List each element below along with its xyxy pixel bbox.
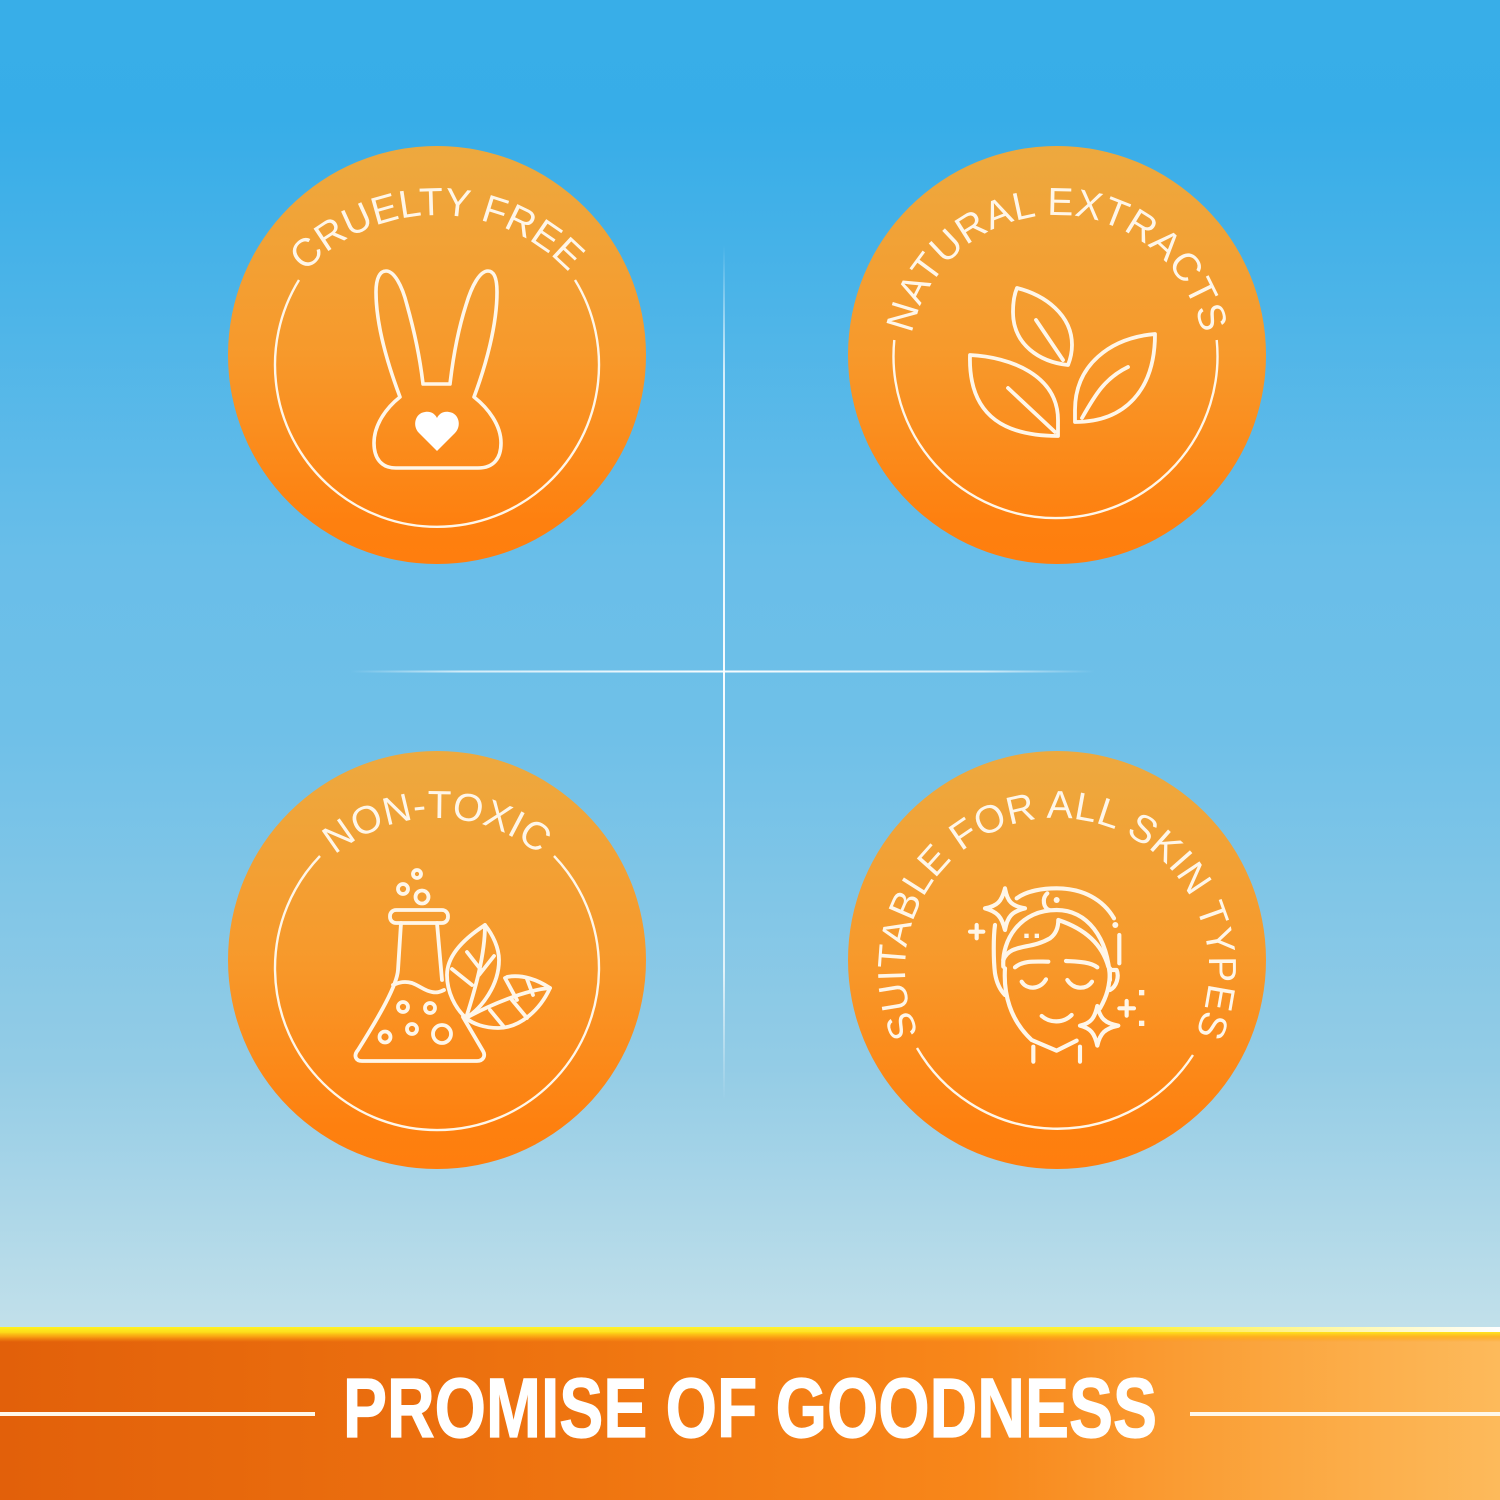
- panel: cruelty free: [228, 146, 646, 564]
- icon: face with sparkles: [970, 888, 1144, 1062]
- label: non-toxic: NON-TOXIC: [322, 791, 550, 853]
- bottom banner: [0, 1327, 1500, 1500]
- panel: non-toxic: [228, 751, 646, 1169]
- icon: rabbit: [374, 271, 501, 468]
- icon: flask with leaves: [355, 870, 550, 1061]
- panel: natural extracts: [848, 146, 1266, 564]
- banner heading: PROMISE OF GOODNESS: [343, 1361, 1157, 1455]
- label: cruelty free: CRUELTY FREE: [292, 188, 586, 271]
- banner rule: right: [1190, 1412, 1500, 1416]
- banner rule: left: [0, 1412, 315, 1416]
- label: natural extracts: NATURAL EXTRACTS: [886, 188, 1226, 331]
- divider cross: [350, 245, 1095, 1100]
- icon: three leaves: [970, 288, 1155, 436]
- panel: suitable for all skin types: [848, 751, 1266, 1169]
- label: suitable for all skin types: SUITABLE FOR ALL SKIN TYPES: [878, 791, 1236, 1038]
